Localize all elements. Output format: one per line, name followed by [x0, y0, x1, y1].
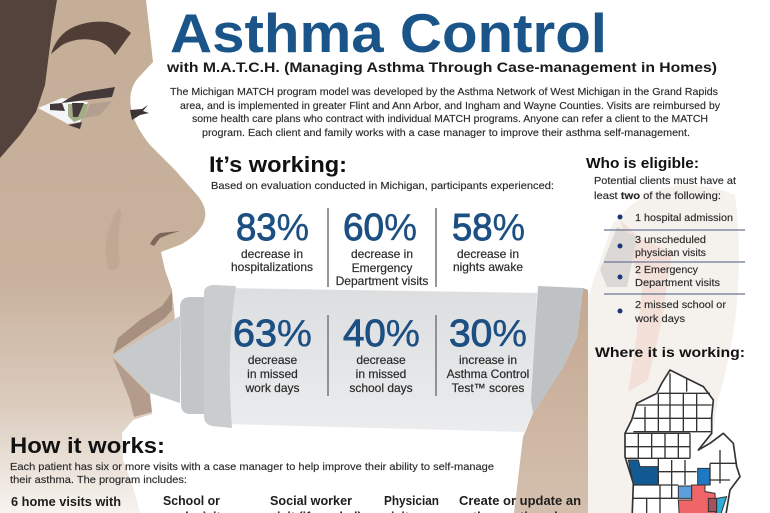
title: Asthma Control: [170, 2, 607, 64]
eligibility intro: Potential clients must have at: [594, 175, 736, 187]
stat: 30%: 30%: [449, 313, 527, 355]
program items: [11, 494, 581, 513]
stat: 83%: 83%: [236, 207, 309, 249]
evaluation note: Based on evaluation conducted in Michigan, participants experienced:: [211, 180, 554, 192]
highlighted counties: [628, 460, 727, 513]
intro paragraph: [170, 86, 721, 139]
inhaler body: [226, 288, 537, 432]
item: home visits: 6 home visits with: [11, 495, 121, 509]
eligibility list: 2 missed school or: [635, 299, 727, 311]
item: school visit: School or: [163, 494, 220, 508]
eligibility list: Department visits: [635, 277, 720, 289]
cheek shading: [106, 208, 122, 270]
eye: [38, 87, 115, 129]
item: social worker: Social worker: [270, 494, 352, 508]
face skin: [0, 0, 205, 513]
stat: 58%: nights awake: [453, 260, 523, 274]
stat: 83%: hospitalizations: [231, 260, 313, 274]
stat: 40%: [343, 313, 420, 395]
stat: 63%: [233, 313, 312, 395]
item: action plan: Create or update an: [459, 494, 581, 508]
heading: who is eligible: Who is eligible:: [586, 155, 699, 172]
subtitle: with M.A.T.C.H. (Managing Asthma Through Case-management in Homes): [166, 59, 717, 75]
intro paragraph: program. Each client and family works with a case manager to improve their asthma self-management.: [202, 127, 690, 139]
background arm silhouette: [587, 185, 739, 513]
eligibility intro: least two of the following:: [594, 190, 721, 202]
eligibility list: physician visits: [635, 247, 706, 259]
intro paragraph: some health care plans who contract with individual MATCH programs. Anyone can refer a client to the MATCH: [192, 113, 708, 125]
intro paragraph: area, and is implemented in greater Flint and Ann Arbor, and Ingham and Wayne Counties. Visits are reimbursed by: [180, 100, 721, 112]
canister: [531, 286, 583, 413]
county grid: [625, 373, 737, 513]
stat: 40%: in missed: [356, 367, 406, 381]
stat: 83%: [231, 207, 313, 274]
state outline: [625, 370, 740, 513]
stat: 30%: increase in: [459, 353, 517, 367]
stat: 58%: 58%: [452, 207, 525, 249]
lower lip: [113, 358, 152, 417]
hair: [0, 0, 57, 158]
stat: 58%: [452, 207, 525, 274]
intro paragraph: The Michigan MATCH program model was developed by the Asthma Network of West Michigan in the Grand Rapids: [170, 86, 718, 98]
stat: 60%: decrease in: [351, 247, 413, 261]
eligibility list: work days: [634, 313, 685, 325]
stat: 60%: Emergency: [352, 261, 412, 275]
stat: 40%: school days: [349, 381, 413, 395]
stat: 63%: 63%: [233, 313, 312, 355]
stat: 60%: [336, 207, 428, 288]
eligibility intro: [594, 175, 736, 202]
collar: [180, 297, 207, 414]
item: social worker: [270, 494, 362, 513]
stat: 60%: Department visits: [336, 274, 428, 288]
eyebrow: [51, 22, 131, 55]
map of Michigan counties: [625, 370, 740, 513]
eligibility list: 2 Emergency: [635, 264, 699, 276]
eligibility list: 3 unscheduled: [635, 234, 706, 246]
stat: 30%: [447, 313, 529, 395]
stat: 30%: Test™ scores: [452, 381, 524, 395]
stat: 30%: Asthma Control: [447, 367, 529, 381]
stat: 63%: decrease: [248, 353, 298, 367]
eligibility list: [604, 212, 745, 325]
stat: 63%: in missed: [247, 367, 298, 381]
how it works description: their asthma. The program includes:: [10, 474, 187, 486]
stat: 83%: decrease in: [241, 247, 303, 261]
heading: it's working: It’s working:: [209, 152, 347, 177]
how it works description: Each patient has six or more visits with a case manager to help improve their ability to self-manage: [10, 461, 494, 473]
stat: 58%: decrease in: [457, 247, 519, 261]
stat: 40%: 40%: [343, 313, 420, 355]
face illustration: [0, 0, 205, 513]
inhaler: [113, 285, 583, 432]
far-eye lashes: [130, 105, 149, 120]
statistics panel: [231, 207, 529, 396]
nostril: [150, 231, 180, 246]
item: physician: Physician: [384, 494, 439, 508]
upper lip: [113, 292, 172, 354]
stat: 40%: decrease: [356, 353, 406, 367]
panel: who is eligible: [586, 155, 745, 325]
mouthpiece: [113, 316, 180, 403]
stat: 63%: work days: [244, 381, 300, 395]
how it works description: [10, 461, 494, 486]
collar large: [204, 285, 236, 428]
heading: how it works: How it works:: [10, 433, 165, 458]
stat: 60%: 60%: [343, 207, 417, 249]
eligibility list: 1 hospital admission: [635, 212, 733, 224]
hand holding inhaler: [514, 288, 588, 513]
heading: where it is working: Where it is working:: [595, 344, 745, 360]
